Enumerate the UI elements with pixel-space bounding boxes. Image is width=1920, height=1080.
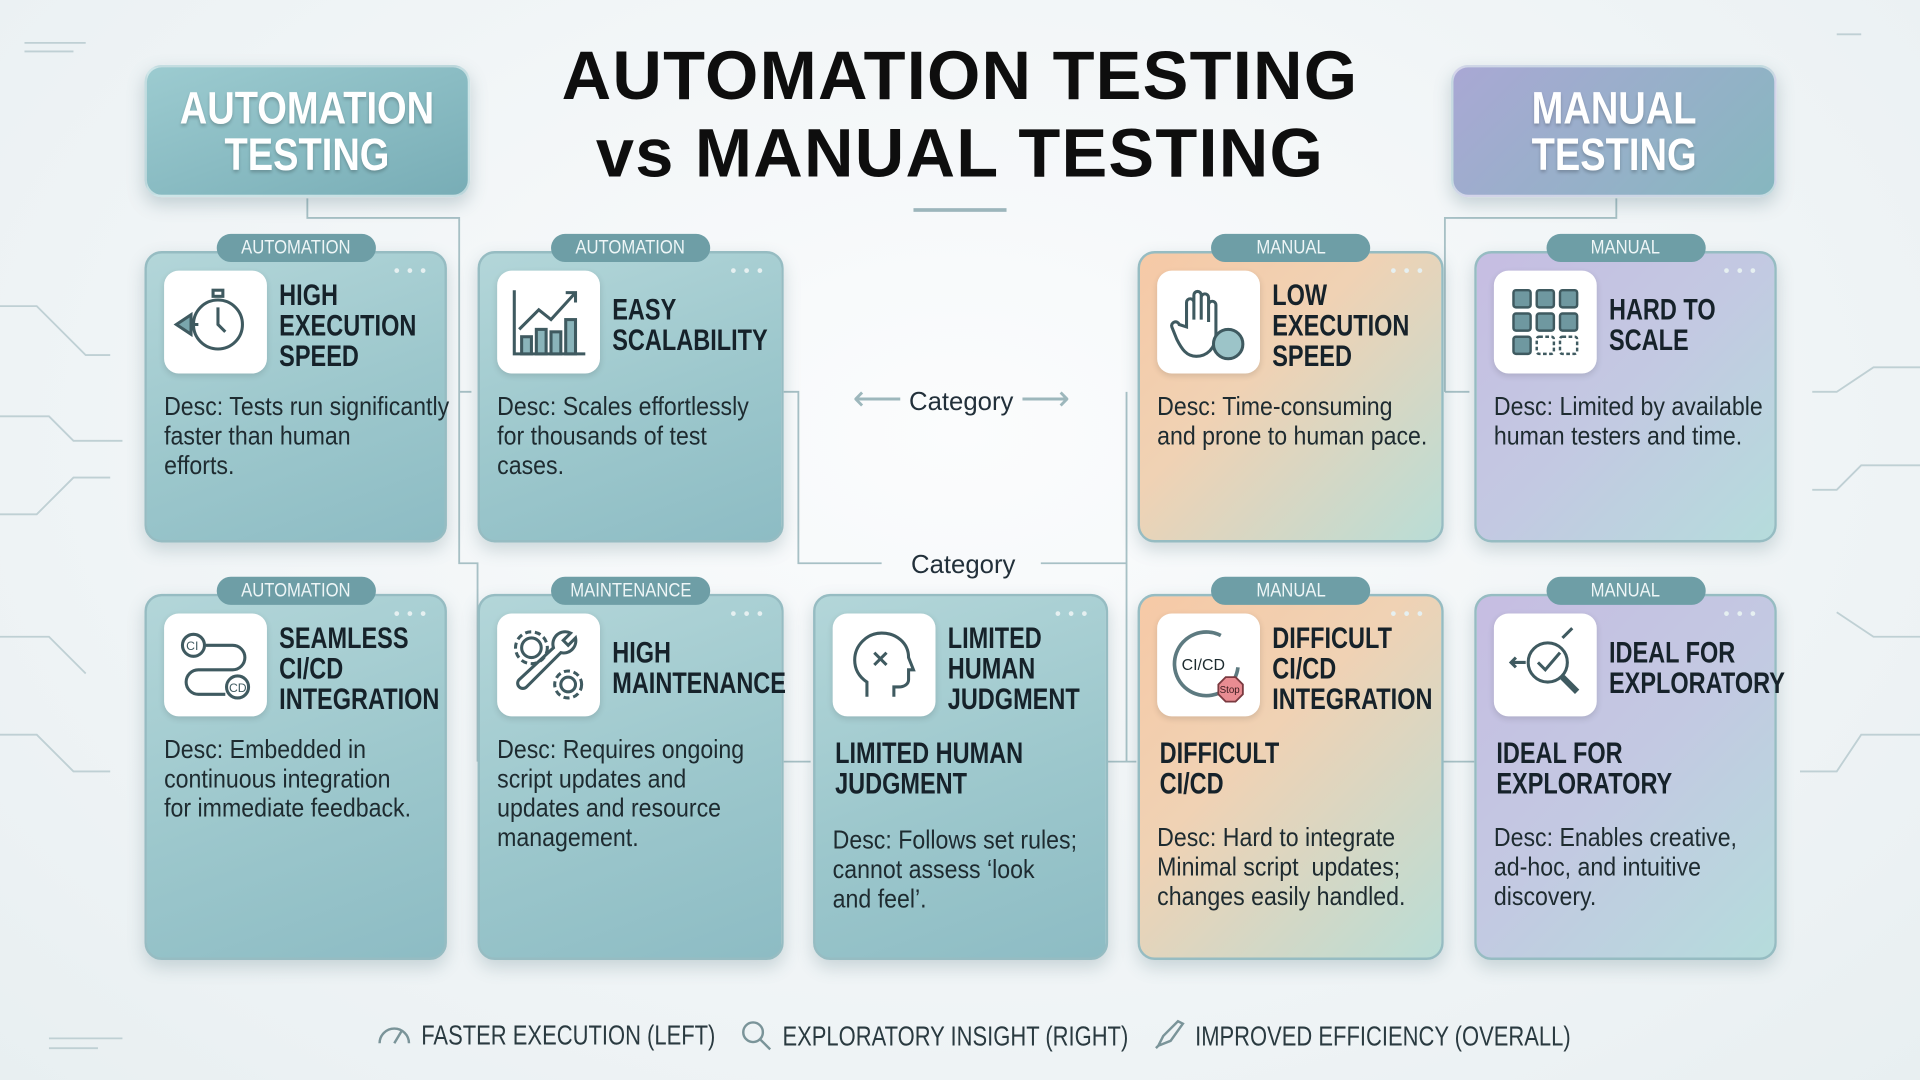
- card: low execution speed: SPEED: [1272, 340, 1352, 373]
- card: high maintenance: • • •: [730, 604, 764, 623]
- card: hard to scale: • • •: [1723, 261, 1757, 280]
- card: easy scalability: [478, 251, 784, 542]
- card: high execution speed: EXECUTION: [279, 310, 416, 343]
- card: easy scalability: for thousands of test: [497, 422, 707, 451]
- card: low execution speed: • • •: [1390, 261, 1424, 280]
- card: seamless ci/cd: [144, 594, 447, 960]
- header: manual testing: [1451, 65, 1777, 197]
- icon: ci/cd stop: [1157, 613, 1260, 716]
- icon: magnifier target: [1494, 613, 1597, 716]
- card: seamless ci/cd: SEAMLESS: [279, 622, 409, 655]
- card: low execution speed: and prone to human pace.: [1157, 422, 1427, 451]
- card: easy scalability: EASY: [612, 294, 676, 327]
- card: ideal for exploratory: [1474, 594, 1777, 960]
- icon: ci/cd loop: CI: [186, 639, 198, 653]
- card: seamless ci/cd: INTEGRATION: [279, 683, 439, 716]
- card: limited human judgment: and feel’.: [833, 885, 927, 913]
- title: AUTOMATION TESTING: [562, 37, 1358, 114]
- card: hard to scale: Desc: Limited by available: [1494, 393, 1763, 421]
- card: high execution speed: SPEED: [279, 340, 359, 373]
- card: seamless ci/cd: for immediate feedback.: [164, 795, 411, 823]
- card: ideal for exploratory: Desc: Enables creative,: [1494, 824, 1737, 852]
- card: difficult ci/cd: CI/CD: [1272, 653, 1336, 686]
- text: AUTOMATION: [576, 238, 685, 258]
- icon: ci/cd stop: Stop: [1220, 685, 1240, 696]
- card: ideal for exploratory: EXPLORATORY: [1496, 768, 1672, 801]
- text: MANUAL: [1591, 238, 1660, 258]
- card: high maintenance: Desc: Requires ongoing: [497, 736, 744, 764]
- card: high maintenance: script updates and: [497, 765, 686, 793]
- card: difficult ci/cd: DIFFICULT: [1160, 737, 1279, 770]
- icon: head: [833, 613, 936, 716]
- card: limited human judgment: HUMAN: [948, 653, 1035, 686]
- card: seamless ci/cd: CI/CD: [279, 653, 343, 686]
- header: manual testing: MANUAL: [1531, 83, 1696, 133]
- card: high maintenance: HIGH: [612, 637, 671, 670]
- header: automation testing: TESTING: [225, 130, 390, 180]
- card: high execution speed: [144, 251, 447, 542]
- card: seamless ci/cd: • • •: [394, 604, 427, 623]
- card: high execution speed: faster than human: [164, 422, 351, 451]
- card: limited human judgment: JUDGMENT: [948, 683, 1080, 716]
- card: high execution speed: Desc: Tests run significantly: [164, 393, 449, 421]
- card: hard to scale: human testers and time.: [1494, 422, 1742, 451]
- text: MAINTENANCE: [570, 580, 691, 601]
- text: MANUAL: [1256, 238, 1325, 258]
- card: difficult ci/cd: CI/CD: [1160, 768, 1224, 801]
- card: low execution speed: LOW: [1272, 279, 1327, 312]
- card: ideal for exploratory: discovery.: [1494, 883, 1596, 911]
- text: MANUAL: [1591, 580, 1660, 601]
- card: easy scalability: • • •: [730, 261, 764, 280]
- header: automation testing: [144, 65, 470, 197]
- card: easy scalability: Desc: Scales effortlessly: [497, 393, 749, 421]
- icon: grid: [1494, 271, 1597, 373]
- card: high execution speed: HIGH: [279, 279, 338, 312]
- card: difficult ci/cd: Minimal script updates;: [1157, 853, 1400, 882]
- card: limited human judgment: Desc: Follows set rules;: [833, 827, 1077, 855]
- category label top: ⟵ Category ⟶: [853, 380, 1070, 418]
- card: limited human judgment: LIMITED HUMAN: [835, 737, 1023, 770]
- legend: faster execution: FASTER EXECUTION (LEFT): [422, 1019, 716, 1051]
- card: high maintenance: MAINTENANCE: [612, 667, 786, 700]
- icon: gears and wrench: [497, 613, 600, 716]
- text: AUTOMATION: [241, 238, 350, 258]
- title: vs MANUAL TESTING: [596, 114, 1324, 191]
- card: difficult ci/cd: INTEGRATION: [1272, 683, 1432, 716]
- card: difficult ci/cd: changes easily handled.: [1157, 883, 1405, 911]
- category label bottom: Category: [911, 551, 1015, 579]
- card: easy scalability: cases.: [497, 452, 564, 480]
- icon: ci/cd loop: [164, 613, 267, 716]
- icon: ci/cd loop: CD: [229, 681, 247, 695]
- card: high maintenance: management.: [497, 824, 639, 852]
- header: manual testing: TESTING: [1531, 130, 1696, 180]
- title: [562, 37, 1358, 191]
- card: ideal for exploratory: EXPLORATORY: [1609, 667, 1785, 700]
- card: limited human judgment: LIMITED: [948, 622, 1042, 655]
- icon: hand: [1157, 271, 1260, 373]
- icon: ci/cd stop: CI/CD: [1182, 657, 1225, 674]
- card: limited human judgment: JUDGMENT: [835, 768, 967, 801]
- card: ideal for exploratory: IDEAL FOR: [1496, 737, 1623, 770]
- text: MANUAL: [1256, 580, 1325, 601]
- legend: improved efficiency: IMPROVED EFFICIENCY (OVERALL): [1196, 1020, 1571, 1052]
- text: AUTOMATION: [241, 580, 350, 601]
- legend: exploratory insight: EXPLORATORY INSIGHT (RIGHT): [783, 1020, 1129, 1052]
- card: high maintenance: [478, 594, 784, 960]
- icon: growth chart: [497, 271, 600, 373]
- card: low execution speed: Desc: Time-consuming: [1157, 393, 1393, 421]
- card: high maintenance: updates and resource: [497, 795, 721, 823]
- card: high execution speed: efforts.: [164, 452, 234, 480]
- card: seamless ci/cd: Desc: Embedded in: [164, 736, 366, 764]
- card: high execution speed: • • •: [394, 261, 427, 280]
- card: limited human judgment: cannot assess ‘look: [833, 856, 1035, 884]
- card: hard to scale: HARD TO: [1609, 294, 1716, 327]
- card: ideal for exploratory: IDEAL FOR: [1609, 637, 1735, 670]
- icon: stopwatch: [164, 271, 267, 373]
- card: limited human judgment: [813, 594, 1108, 960]
- card: difficult ci/cd: Desc: Hard to integrate: [1157, 824, 1395, 852]
- card: hard to scale: SCALE: [1609, 324, 1689, 358]
- card: limited human judgment: • • •: [1055, 604, 1089, 623]
- card: low execution speed: EXECUTION: [1272, 310, 1409, 343]
- card: seamless ci/cd: continuous integration: [164, 765, 391, 793]
- card: low execution speed: [1138, 251, 1444, 542]
- card: hard to scale: [1474, 251, 1777, 542]
- card: difficult ci/cd: DIFFICULT: [1272, 622, 1392, 655]
- card: difficult ci/cd: • • •: [1390, 604, 1424, 623]
- card: ideal for exploratory: • • •: [1723, 604, 1757, 623]
- header: automation testing: AUTOMATION: [180, 83, 435, 133]
- card: difficult ci/cd: [1138, 594, 1444, 960]
- card: easy scalability: SCALABILITY: [612, 324, 768, 358]
- card: ideal for exploratory: ad-hoc, and intuitive: [1494, 853, 1701, 882]
